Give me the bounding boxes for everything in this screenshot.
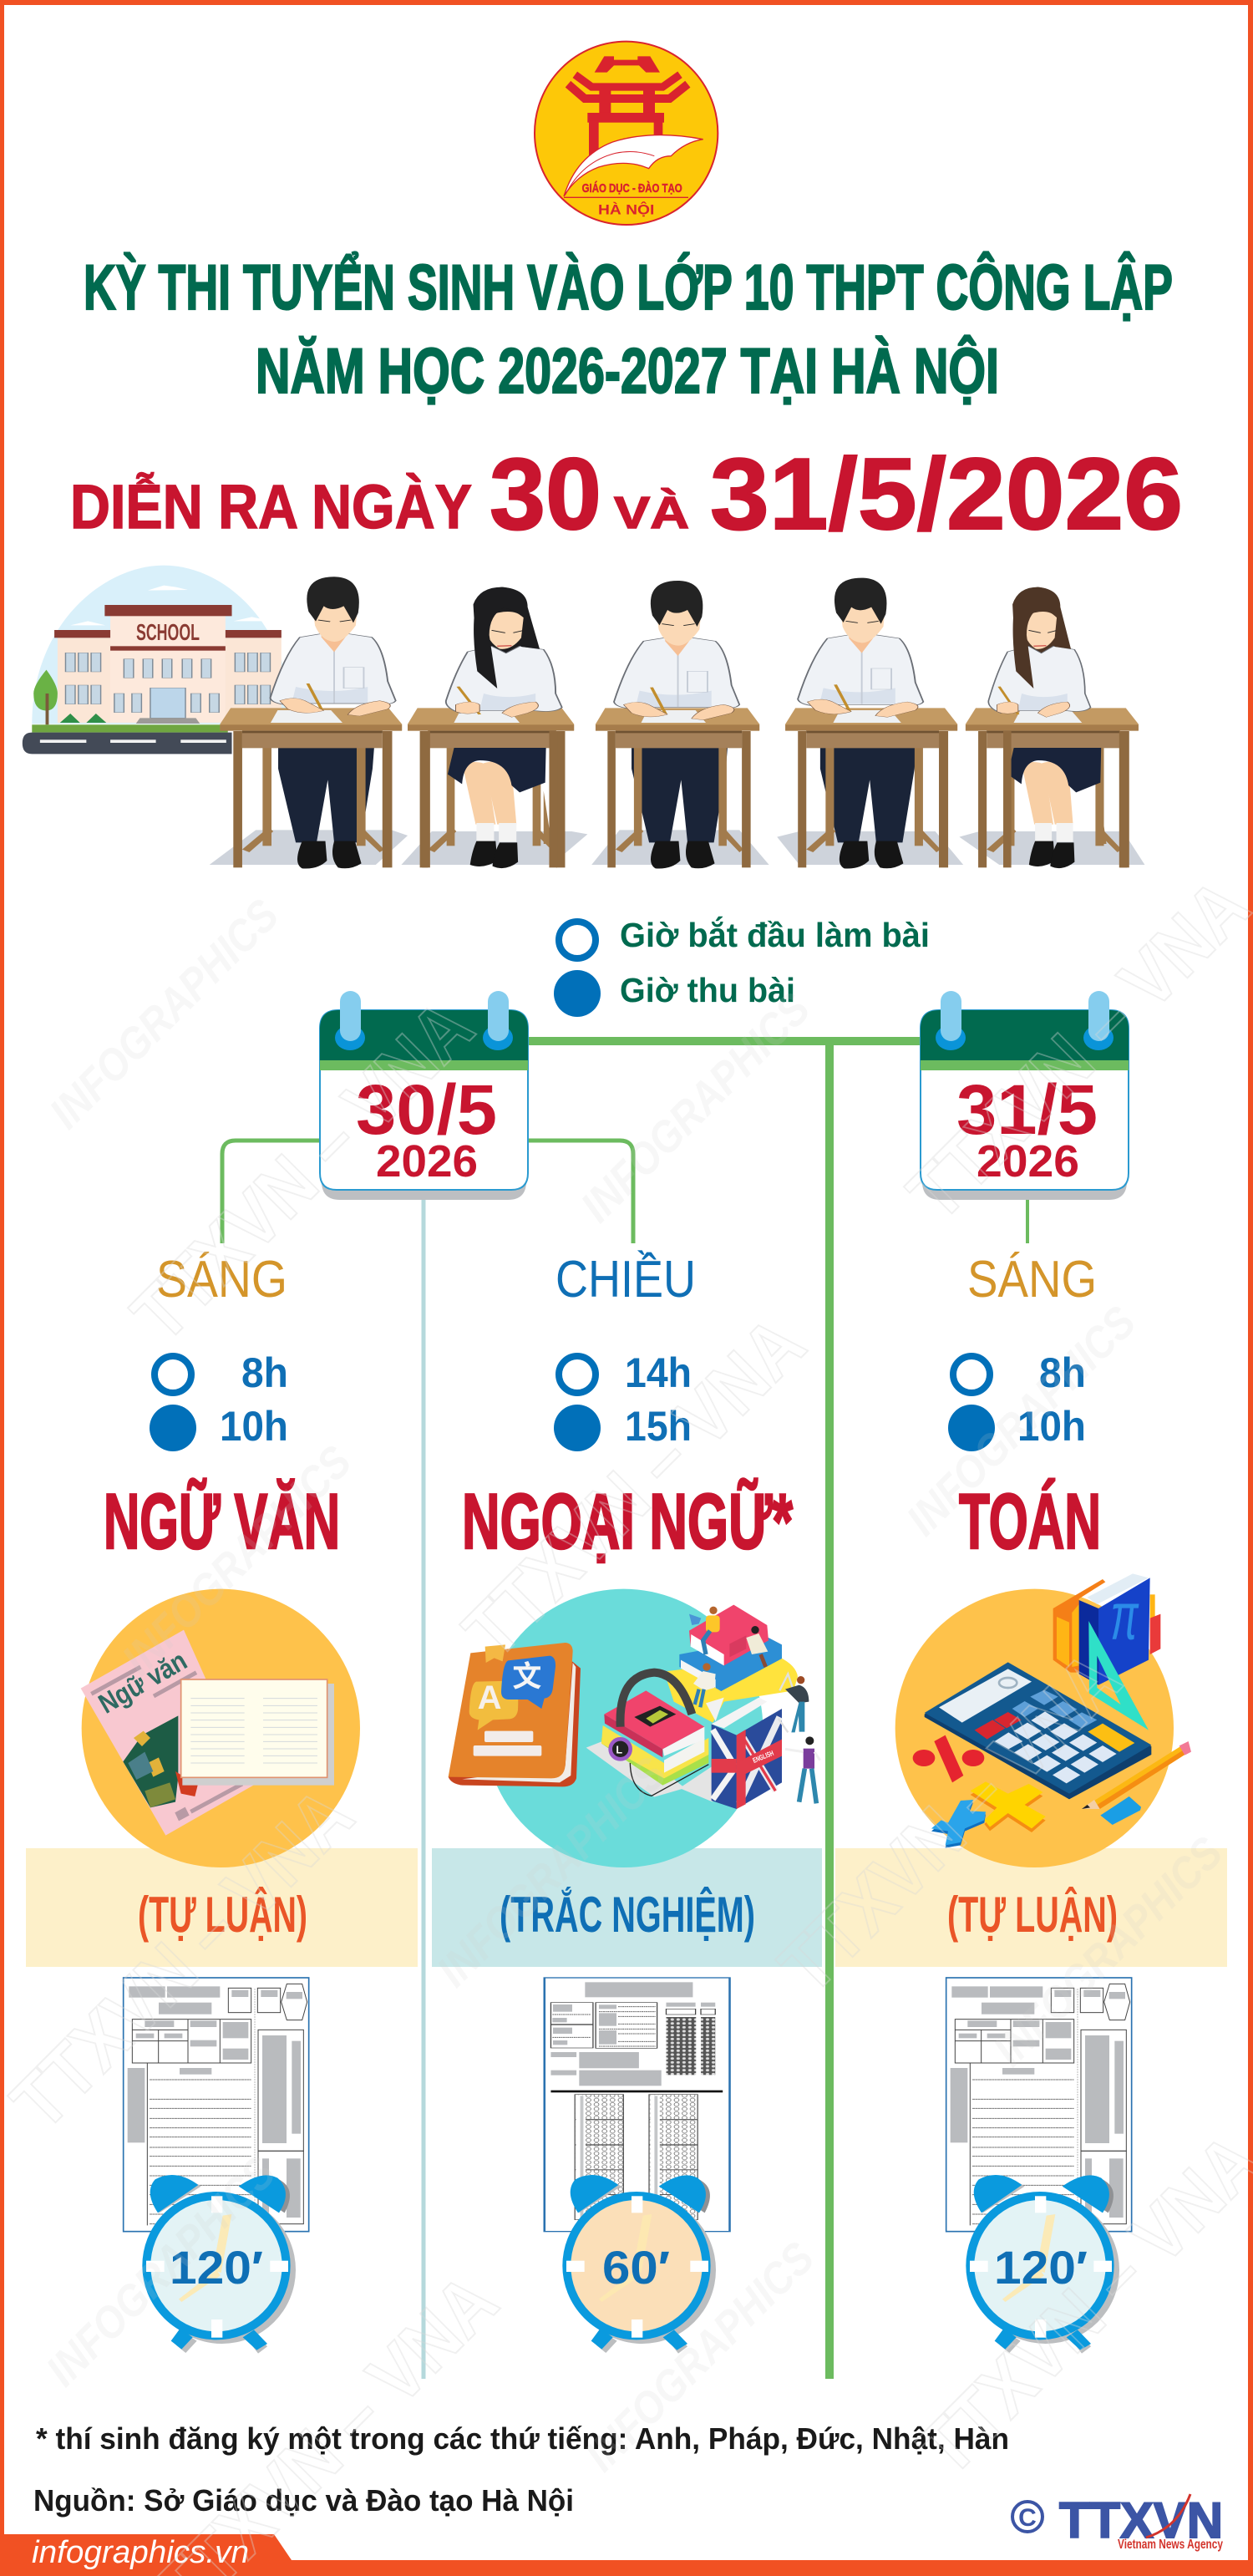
calendar 30/5: 30/5 (356, 1070, 497, 1149)
TTXVN logo: C (1018, 2504, 1037, 2532)
clock 60 minutes (ngoại ngữ) (566, 2175, 716, 2354)
end time 10h: 10h (220, 1403, 288, 1450)
subject: ngoại ngữ: NGOẠI NGỮ* (462, 1477, 793, 1565)
people by the books (779, 1674, 820, 1803)
start time 8h (953, 1349, 1086, 1396)
legend: start time: Giờ bắt đầu làm bài (620, 916, 930, 954)
format band: tự luận 2 (835, 1848, 1227, 1967)
end time 10h: 10h (1017, 1403, 1086, 1450)
headphones and books (601, 1673, 708, 1796)
end time 15h (554, 1403, 692, 1451)
source: Nguồn: Sở Giáo dục và Đào tạo Hà Nội (33, 2483, 574, 2518)
logo: Giáo dục - Đào tạo Hà Nội (535, 42, 718, 225)
student 3 (591, 581, 769, 868)
student 5 (959, 587, 1144, 868)
format band: tự luận 1: (TỰ LUẬN) (138, 1887, 307, 1943)
exam sheet 2: answer sheet (545, 1978, 730, 2232)
logo: Giáo dục - Đào tạo Hà Nội: HÀ NỘI (598, 202, 654, 218)
TTXVN logo: TTXVN (1059, 2492, 1223, 2548)
illustration: math tools (895, 1573, 1191, 1867)
calculator (925, 1662, 1151, 1799)
date headline: DIỄN RA NGÀY (70, 472, 472, 541)
illustration: literature books (81, 1589, 360, 1867)
clock 120 minutes (ngữ văn) (146, 2175, 296, 2354)
format band: tự luận 1 (26, 1848, 418, 1967)
union jack book (712, 1698, 782, 1809)
end time 15h: 15h (625, 1403, 692, 1450)
date headline (70, 437, 1183, 551)
student 1 (210, 577, 408, 868)
calendar 31/5: 31/5 (956, 1070, 1098, 1149)
watermarks: TTXVN – VNA (116, 984, 490, 1358)
subject: toán: TOÁN (959, 1477, 1101, 1565)
logo: Giáo dục - Đào tạo Hà Nội: GIÁO DỤC - ĐÀO TẠO (582, 181, 682, 196)
calendar 30/5: 2026 (376, 1136, 478, 1186)
school sign: SCHOOL (136, 619, 200, 645)
union jack book: ENGLISH (752, 1749, 775, 1765)
exam sheet 1 (124, 1978, 309, 2232)
book stack (586, 1605, 798, 1802)
clock 120 minutes (toán): 120′ (994, 2241, 1088, 2294)
translation book: A (478, 1679, 502, 1716)
start time 8h: 8h (241, 1349, 288, 1396)
date headline: 31/5/2026 (710, 437, 1183, 551)
plus sign (931, 1800, 986, 1848)
legend: end time: Giờ thu bài (620, 971, 795, 1009)
clock 60 minutes (ngoại ngữ): 60′ (602, 2241, 670, 2294)
calendar 31/5: 2026 (977, 1136, 1079, 1186)
calendar 31/5 (921, 991, 1129, 1200)
eraser (1100, 1796, 1141, 1825)
column 3 session (948, 1251, 1097, 1451)
set square (1088, 1621, 1149, 1730)
illustration: foreign language books (449, 1589, 820, 1867)
start time 14h: 14h (625, 1349, 692, 1396)
session label: sáng: SÁNG (967, 1251, 1097, 1308)
school illustration (23, 566, 292, 754)
percent sign (913, 1735, 984, 1782)
clock 120 minutes (toán) (970, 2175, 1119, 2354)
watermarks: INFOGRAPHICS (428, 1748, 676, 1996)
translation book: 文 (512, 1660, 541, 1693)
format band: tự luận 2: (TỰ LUẬN) (947, 1887, 1118, 1943)
end time 10h (150, 1403, 288, 1451)
watermarks: TTXVN – VNA (448, 1301, 821, 1674)
watermarks: TTXVN – VNA (0, 1772, 369, 2146)
illustration: literature books: Ngữ văn (94, 1645, 192, 1720)
session label: sáng: SÁNG (156, 1251, 287, 1308)
multiply sign (971, 1781, 1046, 1832)
watermarks: INFOGRAPHICS (576, 2233, 824, 2481)
watermarks: TTXVN – VNA (763, 1636, 1137, 2009)
student 2 (401, 587, 587, 868)
date headline: VÀ (614, 488, 689, 538)
calendar 30/5 (320, 991, 528, 1200)
legend (554, 916, 930, 1017)
start time 14h (559, 1349, 692, 1396)
clock 120 minutes (ngữ văn): 120′ (170, 2241, 263, 2294)
books: π (1110, 1579, 1139, 1654)
column 2 session (554, 1251, 696, 1451)
watermarks (0, 863, 1253, 2576)
headphones and books: L (616, 1745, 622, 1756)
legend: end time (554, 970, 795, 1017)
connector lines (222, 1041, 1027, 2379)
site tag: infographics.vn (32, 2535, 249, 2570)
end time 10h (948, 1403, 1086, 1451)
watermarks: INFOGRAPHICS (571, 983, 819, 1232)
session label: chiều: CHIỀU (555, 1251, 696, 1308)
format band: trắc nghiệm (432, 1848, 822, 1967)
watermarks: INFOGRAPHICS (37, 2147, 285, 2396)
students at desks (210, 577, 1144, 868)
books (1053, 1573, 1160, 1685)
watermarks: INFOGRAPHICS (40, 890, 288, 1138)
exam sheet 3 (946, 1978, 1132, 2232)
pencil (1082, 1741, 1191, 1809)
start time 8h: 8h (1039, 1349, 1086, 1396)
watermarks: INFOGRAPHICS (897, 1297, 1145, 1545)
subject: ngữ văn: NGỮ VĂN (104, 1477, 340, 1565)
format band: trắc nghiệm: (TRẮC NGHIỆM) (500, 1887, 755, 1943)
column 1 session (150, 1251, 288, 1451)
title line 2: NĂM HỌC 2026-2027 TẠI HÀ NỘI (256, 336, 999, 407)
start time 8h (155, 1349, 288, 1396)
watermarks: INFOGRAPHICS (113, 1436, 361, 1684)
footnote: * thí sinh đăng ký một trong các thứ tiếng: Anh, Pháp, Đức, Nhật, Hàn (36, 2421, 1009, 2456)
date headline: 30 (490, 437, 601, 551)
translation book (449, 1643, 581, 1786)
student 4 (777, 578, 963, 868)
